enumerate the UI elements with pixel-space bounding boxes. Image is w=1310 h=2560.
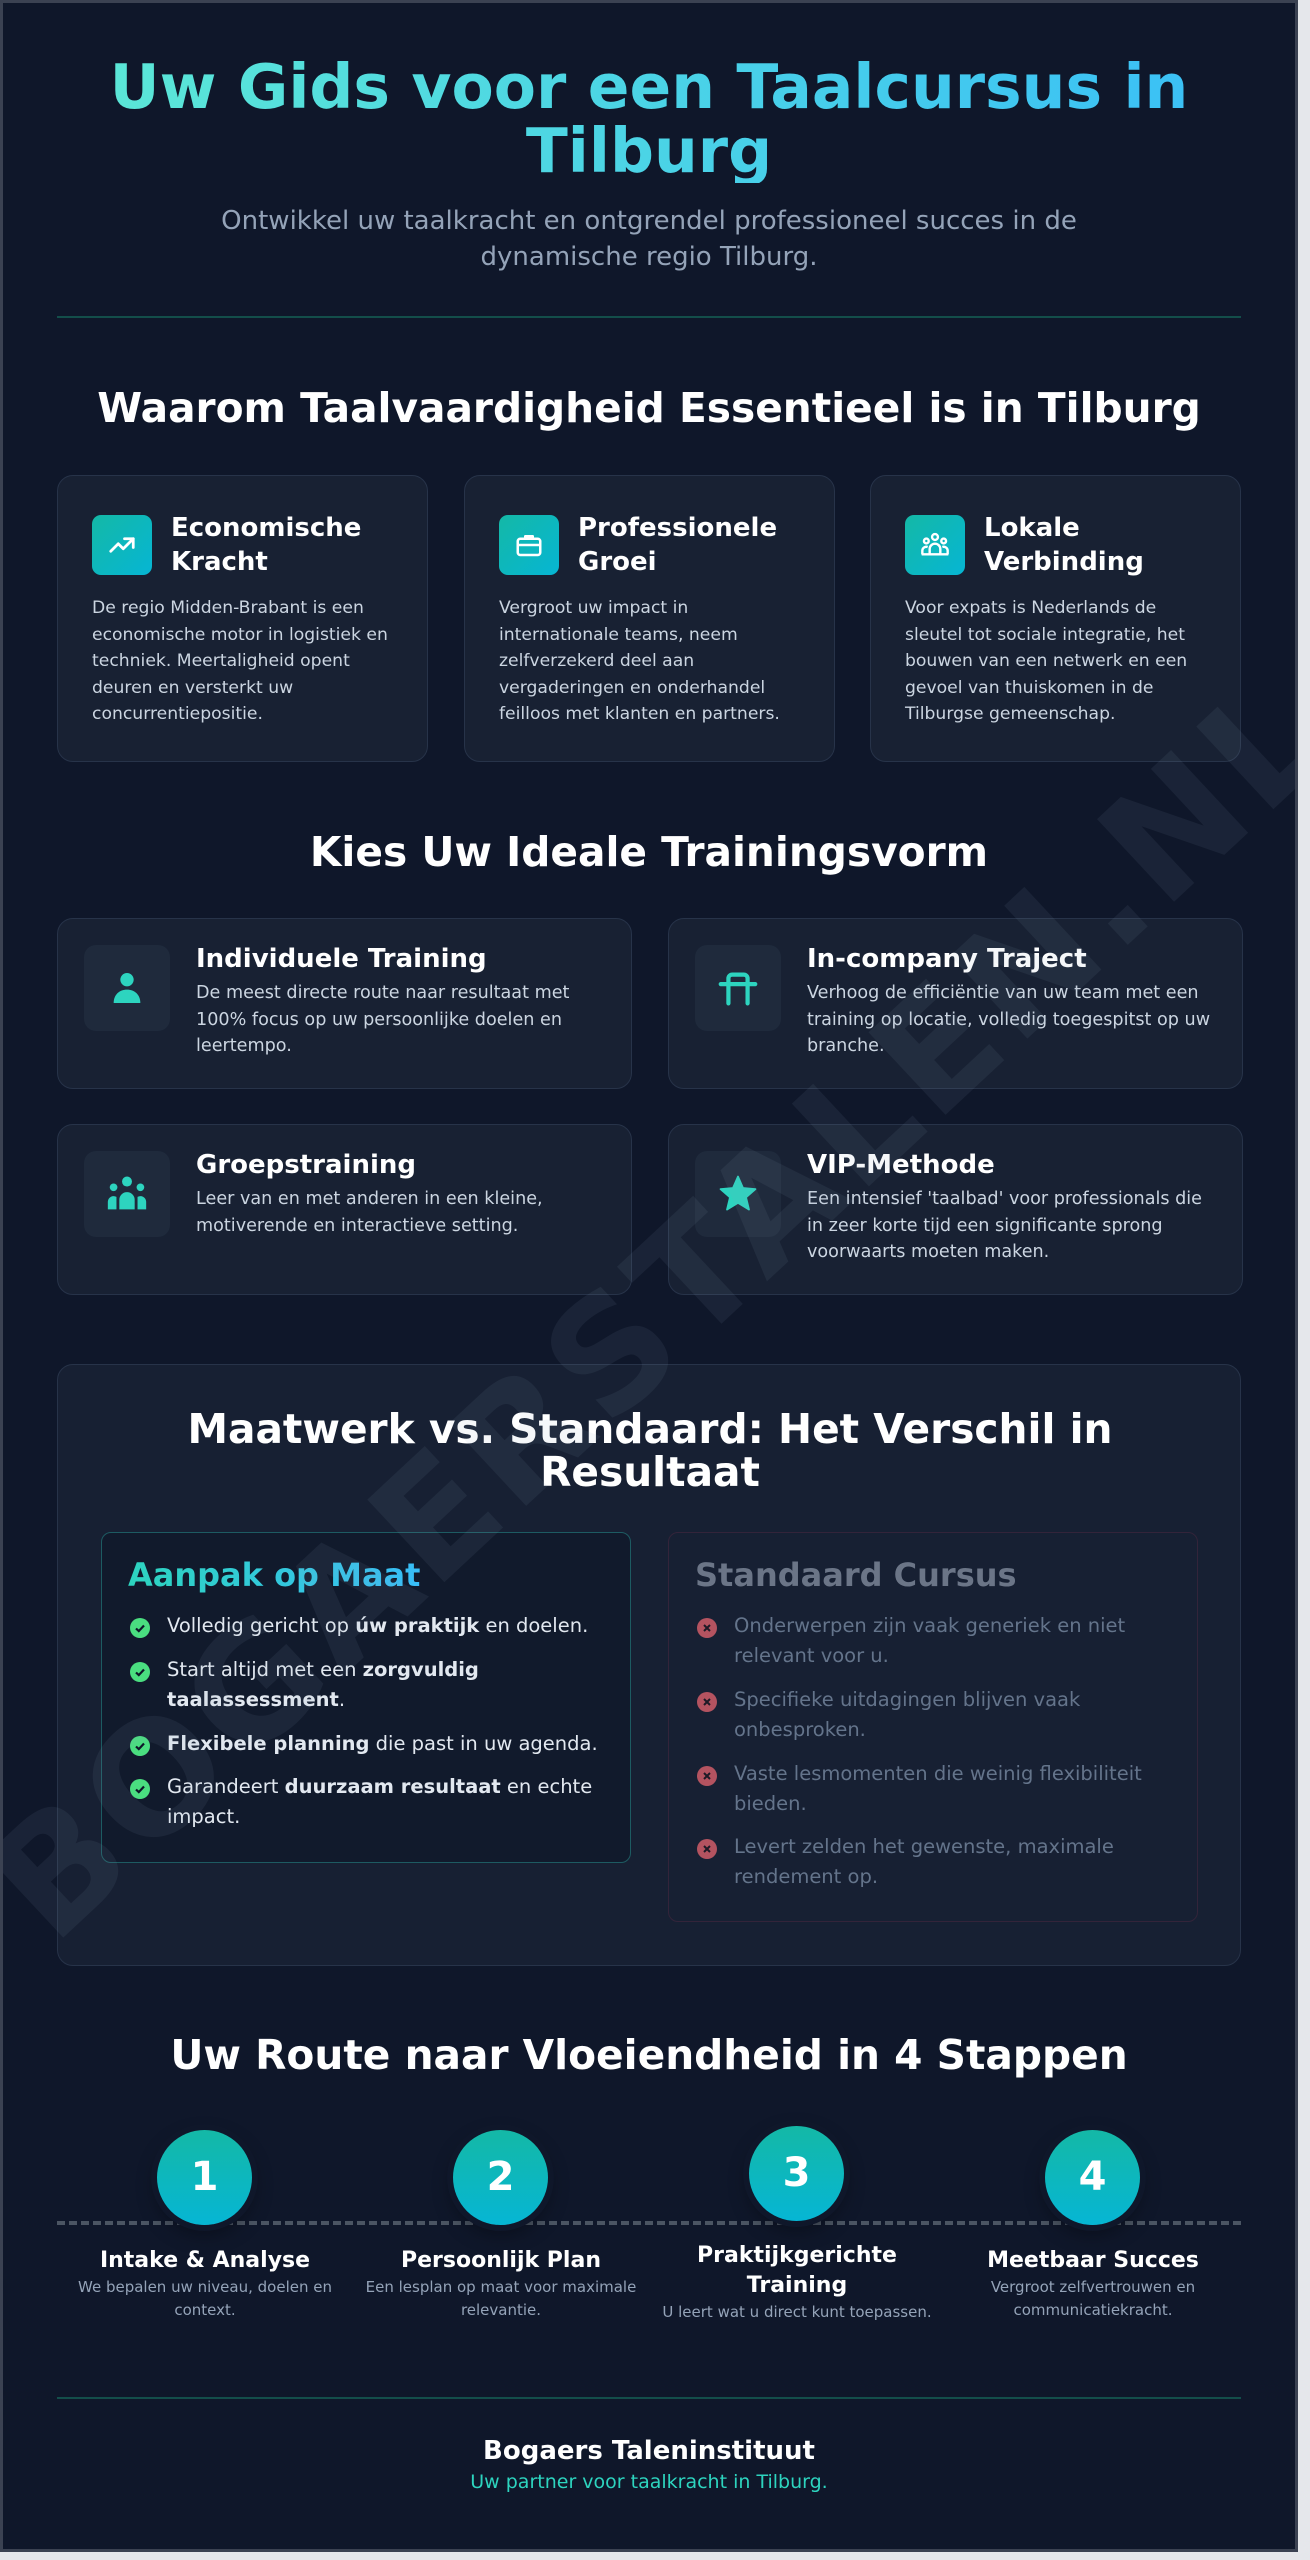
heading: trainingsvorm: Kies Uw Ideale Trainingsvorm <box>310 828 988 876</box>
text: Verhoog de efficiëntie van uw team met een training op locatie, volledig toegespitst op uw branche. <box>807 983 1210 1056</box>
step text: Intake & Analyse <box>100 2248 310 2273</box>
list: Specifieke uitdagingen blijven vaak onbesproken. <box>734 1688 1080 1741</box>
circle: 1 <box>191 2154 218 2200</box>
card text: Voor expats is Nederlands de sleutel tot sociale integratie, het bouwen van een netwerk en een gevoel van thuiskomen in de Tilburgse gemeenschap. <box>905 598 1187 724</box>
heading: waarom: Waarom Taalvaardigheid Essentieel is in Tilburg <box>97 384 1201 432</box>
card: professionele groei <box>464 475 835 762</box>
step 3 <box>662 2126 932 2321</box>
list: Onderwerpen zijn vaak generiek en niet relevant voor u. <box>734 1614 1125 1667</box>
training: individueel <box>57 918 632 1089</box>
subtitle: dynamische regio Tilburg. <box>481 242 817 272</box>
text: Een intensief 'taalbad' voor professionals die in zeer korte tijd een significante sprong voorwaarts moeten maken. <box>807 1189 1202 1262</box>
step text <box>987 2248 1199 2319</box>
panel: comparison <box>57 1364 1241 1966</box>
card: economische kracht <box>57 475 428 762</box>
heading <box>188 1405 1112 1496</box>
title <box>3 55 1295 183</box>
icon: star <box>695 1151 781 1237</box>
training: VIP <box>668 1124 1243 1295</box>
list: Vaste lesmomenten die weinig flexibiliteit bieden. <box>734 1762 1142 1815</box>
circle <box>1045 2130 1140 2225</box>
step text: Een lesplan op maat voor maximale relevantie. <box>366 2278 636 2319</box>
heading: Resultaat <box>540 1448 760 1496</box>
title: In-company Traject <box>807 944 1087 974</box>
step 1 <box>78 2130 332 2319</box>
step 2 <box>366 2130 636 2319</box>
step text <box>78 2248 332 2319</box>
list: Volledig gericht op úw praktijk en doelen. <box>167 1614 588 1637</box>
card title: Lokale <box>984 513 1080 543</box>
box title: Aanpak op Maat <box>128 1556 420 1594</box>
card text: De regio Midden-Brabant is een economische motor in logistiek en techniek. Meertaligheid opent deuren en versterkt uw concurrentiepositie. <box>92 598 388 724</box>
step text: Persoonlijk Plan <box>401 2248 601 2273</box>
step text: Praktijkgerichte Training <box>697 2243 897 2298</box>
box: standaard <box>668 1532 1198 1922</box>
text: De meest directe route naar resultaat met 100% focus op uw persoonlijke doelen en leertempo. <box>196 983 569 1056</box>
circle: 4 <box>1079 2154 1106 2200</box>
footer: Uw partner voor taalkracht in Tilburg. <box>470 2471 828 2493</box>
card title: Verbinding <box>984 547 1144 577</box>
step text: We bepalen uw niveau, doelen en context. <box>78 2278 332 2319</box>
circle: 2 <box>487 2154 514 2200</box>
box: maatwerk <box>101 1532 631 1863</box>
card title: Kracht <box>171 547 268 577</box>
subtitle: Ontwikkel uw taalkracht en ontgrendel professioneel succes in de <box>221 206 1077 236</box>
circle: 3 <box>783 2150 810 2196</box>
card text: Vergroot uw impact in internationale teams, neem zelfverzekerd deel aan vergaderingen en onderhandel feilloos met klanten en partners. <box>499 598 780 724</box>
card title <box>984 513 1144 577</box>
footer: Bogaers Taleninstituut <box>483 2436 815 2466</box>
list: Flexibele planning die past in uw agenda. <box>167 1732 598 1755</box>
heading: Maatwerk vs. Standaard: Het Verschil in <box>188 1405 1112 1453</box>
icon: community <box>905 515 965 575</box>
card title: Groei <box>578 547 657 577</box>
step text: Meetbaar Succes <box>987 2248 1199 2273</box>
list <box>697 1614 1142 1888</box>
text: Leer van en met anderen in een kleine, motiverende en interactieve setting. <box>196 1189 543 1236</box>
icon: person <box>84 945 170 1031</box>
heading: route: Uw Route naar Vloeiendheid in 4 Stappen <box>170 2031 1128 2079</box>
box title: Standaard Cursus <box>695 1556 1017 1594</box>
training: in-company <box>668 918 1243 1089</box>
card: lokale verbinding <box>870 475 1241 762</box>
title: VIP-Methode <box>807 1150 995 1180</box>
step 4 <box>987 2130 1199 2319</box>
card title: Economische <box>171 513 361 543</box>
step text: Vergroot zelfvertrouwen en communicatiekracht. <box>991 2278 1195 2319</box>
step text <box>366 2248 636 2319</box>
icon: group <box>84 1151 170 1237</box>
card title <box>171 513 361 577</box>
title: Individuele Training <box>196 944 487 974</box>
list <box>130 1614 598 1828</box>
list: Start altijd met een zorgvuldig taalassessment. <box>167 1658 479 1711</box>
circle <box>749 2126 844 2221</box>
training: groep <box>57 1124 632 1295</box>
icon: briefcase <box>499 515 559 575</box>
title: Tilburg <box>526 115 772 187</box>
circle <box>157 2130 252 2225</box>
icon: desk <box>695 945 781 1031</box>
icon: trend <box>92 515 152 575</box>
title: Groepstraining <box>196 1150 416 1180</box>
step text: U leert wat u direct kunt toepassen. <box>662 2303 932 2321</box>
list: Garandeert duurzaam resultaat en echte impact. <box>167 1775 592 1828</box>
card title: Professionele <box>578 513 777 543</box>
dashed timeline <box>57 2221 1241 2225</box>
subtitle <box>221 206 1077 272</box>
circle <box>453 2130 548 2225</box>
list: Levert zelden het gewenste, maximale rendement op. <box>734 1835 1114 1888</box>
card title <box>578 513 777 577</box>
title: Uw Gids voor een Taalcursus in <box>110 51 1188 123</box>
step text <box>662 2243 932 2321</box>
footer <box>470 2436 828 2493</box>
